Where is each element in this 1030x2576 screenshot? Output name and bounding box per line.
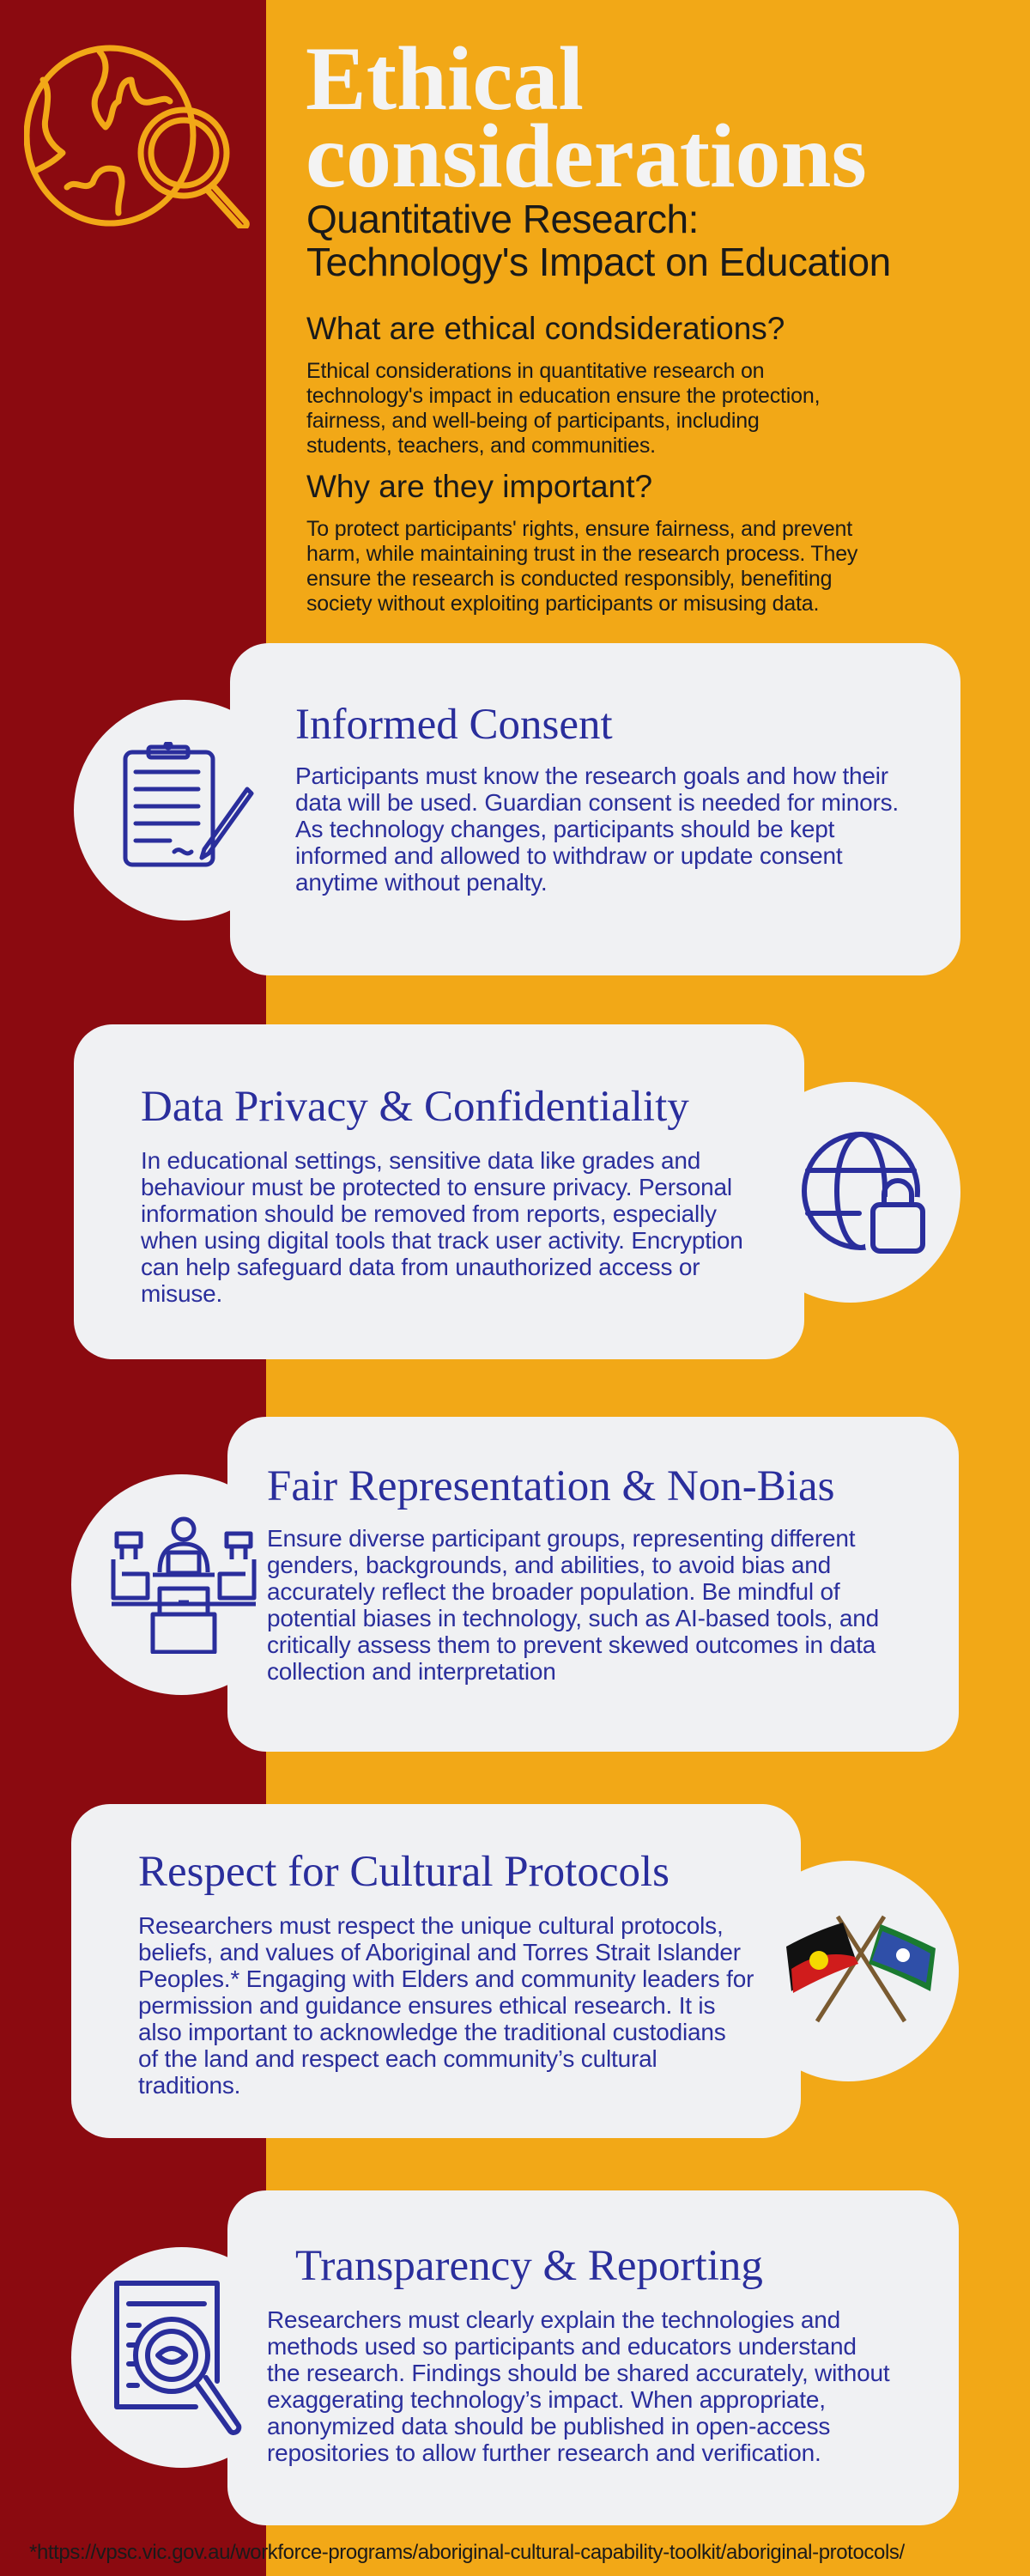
text block: definition: technology's impact in education ensure the protection, [306,384,820,408]
text block: Peoples.* Engaging with Elders and community leaders for [138,1965,754,1992]
text block: Ensure diverse participant groups, representing different [267,1525,855,1552]
panel: fair representation [71,1417,959,1752]
title: Ethical [306,28,584,129]
text block: definition: students, teachers, and communities. [306,434,656,458]
text block: In educational settings, sensitive data like grades and [141,1147,700,1174]
title [306,28,867,206]
text block: informed and allowed to withdraw or update consent [295,842,843,869]
text block: misuse. [141,1280,222,1307]
text block [295,762,899,896]
title: considerations [306,106,867,206]
subtitle: Technology's Impact on Education [306,240,891,284]
icon: people at desks [112,1516,256,1654]
text block: definition: Ethical considerations in quantitative research on [306,359,764,383]
text block: beliefs, and values of Aboriginal and Torres Strait Islander [138,1939,741,1965]
text block: exaggerating technology’s impact. When appropriate, [267,2386,826,2413]
text block: anytime without penalty. [295,869,548,896]
text block: can help safeguard data from unauthorized access or [141,1254,700,1280]
heading: Respect for Cultural Protocols [138,1848,670,1896]
text block: permission and guidance ensures ethical research. It is [138,1992,715,2019]
subtitle [306,197,891,284]
text block: importance: ensure the research is conducted responsibly, benefiting [306,567,832,591]
text block: behaviour must be protected to ensure privacy. Personal [141,1174,732,1200]
heading: what are ethical considerations: What are ethical condsiderations? [306,311,785,346]
text block: importance: To protect participants' rights, ensure fairness, and prevent [306,517,852,541]
heading: informed consent: Informed Consent [295,701,613,749]
text block: importance [306,517,858,616]
icon: document with magnifier [114,2281,242,2435]
text block: critically assess them to prevent skewed outcomes in data [267,1631,876,1658]
text block: importance: society without exploiting participants or misusing data. [306,592,819,616]
icon: globe with magnifier [24,45,250,228]
text block: Researchers must clearly explain the technologies and [267,2306,840,2333]
text block: the research. Findings should be shared accurately, without [267,2360,889,2386]
text block: traditions. [138,2072,240,2099]
heading: Data Privacy & Confidentiality [141,1083,689,1131]
panel: transparency [71,2190,959,2525]
text block: repositories to allow further research and verification. [267,2439,821,2466]
text block [267,2306,889,2466]
text block: potential biases in technology, such as AI-based tools, and [267,1605,879,1631]
panel: informed consent [74,643,960,975]
text block: collection and interpretation [267,1658,556,1685]
text block: definition [306,359,820,458]
heading: Fair Representation & Non-Bias [267,1462,834,1510]
text block: Researchers must respect the unique cultural protocols, [138,1912,724,1939]
text block: definition: fairness, and well-being of participants, including [306,409,760,433]
subtitle: Quantitative Research: [306,197,699,241]
text block: information should be removed from reports, especially [141,1200,717,1227]
text block: when using digital tools that track user activity. Encryption [141,1227,743,1254]
heading: why important: Why are they important? [306,469,652,504]
icon: crossed flags [786,1915,936,2023]
text block: accurately reflect the broader population. Be mindful of [267,1578,839,1605]
text block: genders, backgrounds, and abilities, to avoid bias and [267,1552,831,1578]
text block [267,1525,879,1685]
panel: cultural protocols [71,1804,959,2138]
text block: Participants must know the research goals and how their [295,762,888,789]
text block [138,1912,754,2099]
text block: of the land and respect each community’s cultural [138,2045,657,2072]
heading: Transparency & Reporting [295,2242,763,2290]
text block: importance: harm, while maintaining trust in the research process. They [306,542,857,566]
footnote: *https://vpsc.vic.gov.au/workforce-programs/aboriginal-cultural-capability-toolkit/aboriginal-protocols/ [29,2541,905,2564]
icon: clipboard with pen [124,742,254,867]
text block: anonymized data should be published in open-access [267,2413,830,2439]
text block: also important to acknowledge the traditional custodians [138,2019,726,2045]
text block: As technology changes, participants should be kept [295,816,834,842]
text block: data will be used. Guardian consent is needed for minors. [295,789,899,816]
icon: globe with lock [802,1132,925,1254]
text block: methods used so participants and educators understand [267,2333,857,2360]
panel: data privacy [74,1024,960,1359]
text block [141,1147,743,1307]
